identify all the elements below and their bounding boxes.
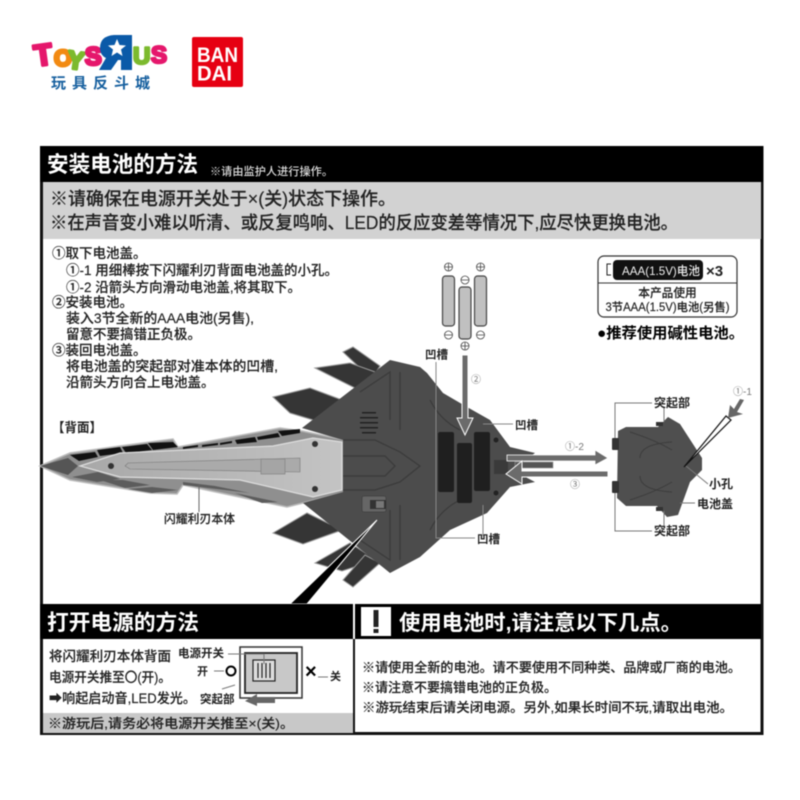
heading: 打开电源的方法 bbox=[47, 610, 199, 635]
blade tip bbox=[40, 458, 78, 475]
logo: Toys R Us: S bbox=[85, 43, 102, 71]
labels: grooves: 凹槽 bbox=[515, 418, 538, 432]
handle detail bbox=[343, 372, 460, 560]
instructions text: ③装回电池盖。 bbox=[52, 343, 146, 358]
blade outer bbox=[40, 428, 345, 507]
vents bbox=[360, 412, 378, 434]
power switch bbox=[362, 496, 386, 512]
instructions text bbox=[52, 246, 338, 390]
power note bbox=[43, 713, 353, 734]
caution text bbox=[362, 660, 741, 715]
instructions text: 将电池盖的突起部对准本体的凹槽, bbox=[66, 358, 278, 374]
body bbox=[302, 360, 535, 573]
arrow: replace cover: ③ bbox=[570, 479, 580, 491]
logo subtitle: 玩具反斗城 bbox=[51, 74, 156, 92]
logo: Toys R Us bbox=[32, 35, 167, 92]
logo: Bandai: BAN bbox=[197, 44, 238, 67]
panel: battery cautions bbox=[354, 604, 763, 734]
battery spec box: ×3 bbox=[706, 263, 723, 280]
heading bar bbox=[40, 146, 763, 182]
label: sword body: 闪耀利刃本体 bbox=[164, 512, 235, 526]
battery spec box: 3节AAA(1.5V)电池(另售) bbox=[606, 300, 730, 314]
recommendation: ●推荐使用碱性电池。 bbox=[597, 324, 744, 342]
battery spec box: 本产品使用 bbox=[638, 286, 697, 300]
power text: ➡响起启动音,LED发光。 bbox=[49, 690, 196, 706]
instructions text: ②安装电池。 bbox=[52, 295, 133, 310]
switch diagram: 电源开关 bbox=[178, 646, 224, 660]
logo: Toys R Us: S bbox=[151, 42, 167, 69]
label: back side: 【背面】 bbox=[52, 420, 102, 435]
switch diagram bbox=[178, 646, 341, 706]
notice band: ※请确保在电源开关处于×(关)状态下操作。 bbox=[50, 189, 396, 209]
arrow: push hole bbox=[684, 386, 752, 467]
arrow: replace cover bbox=[506, 461, 608, 491]
notice band bbox=[43, 182, 761, 239]
labels: cover parts: 小孔 bbox=[709, 477, 733, 491]
instructions text: 装入3节全新的AAA电池(另售), bbox=[66, 310, 254, 326]
logo: Bandai: DAI bbox=[197, 62, 232, 86]
instructions text: 留意不要搞错正负极。 bbox=[66, 326, 201, 342]
icon: reversed R with star bbox=[99, 35, 132, 70]
arrow: install batteries bbox=[457, 355, 481, 435]
logo: Toys R Us: U bbox=[133, 43, 150, 70]
illustration: sword back view bbox=[40, 347, 553, 587]
instructions text: ①-2 沿箭头方向滑动电池盖,将其取下。 bbox=[66, 279, 301, 295]
icon: warning bbox=[361, 607, 391, 636]
labels: cover parts: 电池盖 bbox=[697, 496, 733, 511]
blade centre bbox=[80, 438, 342, 497]
labels: cover parts: 突起部 bbox=[654, 395, 690, 410]
caution text: ※请使用全新的电池。请不要使用不同种类、品牌或厂商的电池。 bbox=[362, 660, 741, 675]
logo: Toys R Us: Y bbox=[66, 46, 86, 76]
switch diagram: 开 bbox=[197, 665, 208, 678]
arrow: slide off: ①-2 bbox=[565, 441, 584, 453]
panel: battery install bbox=[40, 146, 763, 734]
instructions text: ①取下电池盖。 bbox=[52, 246, 146, 261]
instructions text: 沿箭头方向合上电池盖。 bbox=[66, 374, 214, 390]
power note: ※游玩后,请务必将电源开关推至×(关)。 bbox=[48, 716, 294, 731]
heading bar: 安装电池的方法 bbox=[47, 152, 198, 177]
battery spec box: AAA(1.5V)电池 bbox=[622, 263, 700, 278]
battery cover bbox=[612, 417, 702, 517]
spikes bbox=[273, 347, 380, 587]
panel: power on bbox=[40, 604, 353, 734]
labels: cover parts: 突起部 bbox=[654, 523, 690, 538]
power text: 将闪耀利刃本体背面 bbox=[49, 648, 171, 664]
heading bar: ※请由监护人进行操作。 bbox=[210, 164, 333, 178]
switch diagram: 关 bbox=[330, 669, 341, 683]
batteries bbox=[442, 263, 486, 350]
arrow: slide off bbox=[507, 441, 608, 465]
switch diagram: 突起部 bbox=[200, 692, 235, 706]
arrow: push hole: ①-1 bbox=[733, 386, 752, 398]
labels: grooves bbox=[425, 348, 538, 546]
power text: 电源开关推至〇(开)。 bbox=[49, 670, 171, 685]
caution heading: 使用电池时,请注意以下几点。 bbox=[399, 611, 682, 635]
caution text: ※游玩结束后请关闭电源。另外,如果长时间不玩,请取出电池。 bbox=[362, 700, 733, 715]
battery compartments bbox=[438, 432, 490, 503]
logo: Toys R Us: O bbox=[54, 45, 72, 71]
battery spec box bbox=[598, 256, 737, 317]
blade lower segments bbox=[72, 472, 278, 503]
labels: cover parts bbox=[615, 395, 733, 538]
labels: grooves: 凹槽 bbox=[425, 348, 448, 362]
label: sword body bbox=[164, 485, 235, 526]
switch diagram: × bbox=[305, 661, 317, 683]
pointer wedge bbox=[290, 520, 377, 604]
notice band: ※在声音变小难以听清、或反复鸣响、LED的反应变差等情况下,应尽快更换电池。 bbox=[50, 212, 678, 233]
power text bbox=[49, 648, 196, 706]
arrow: install batteries: ② bbox=[471, 374, 481, 386]
logo: Bandai bbox=[192, 37, 243, 87]
blade upper vents bbox=[70, 429, 300, 461]
instructions text: ①-1 用细棒按下闪耀利刃背面电池盖的小孔。 bbox=[66, 262, 338, 278]
caution text: ※请注意不要搞错电池的正负极。 bbox=[362, 680, 557, 695]
logo: Toys R Us: T bbox=[32, 38, 55, 73]
labels: grooves: 凹槽 bbox=[477, 532, 500, 546]
